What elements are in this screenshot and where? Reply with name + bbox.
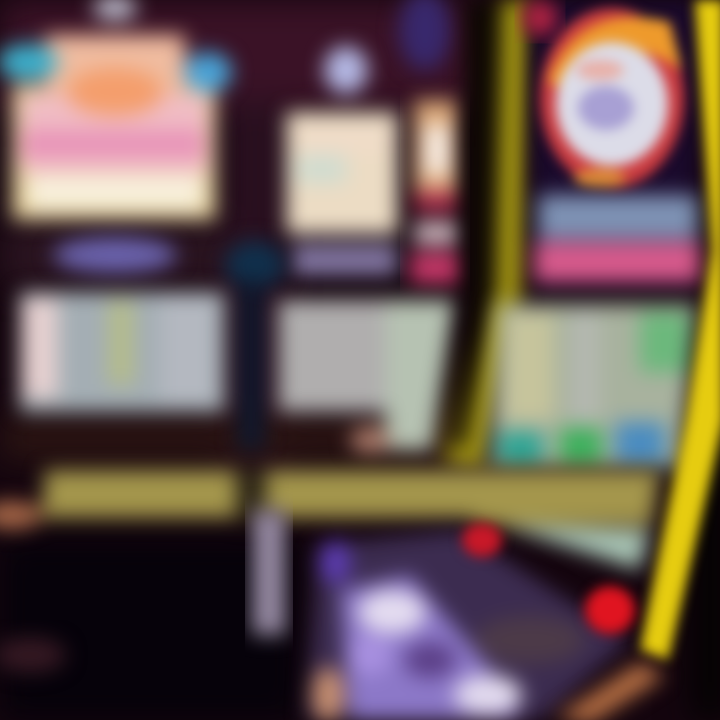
olive ledge bbox=[0, 468, 660, 570]
button deck bbox=[306, 530, 630, 720]
lower middle screen bbox=[278, 300, 455, 454]
narrow machine screen bbox=[410, 100, 460, 284]
bonus wheel bbox=[540, 8, 684, 188]
yellow pillar bbox=[444, 0, 530, 470]
white column bbox=[252, 510, 286, 635]
left top machine screen bbox=[0, 0, 232, 220]
blue-purple top accents bbox=[53, 0, 451, 450]
yellow cabinet edge bbox=[640, 0, 720, 660]
orange lower edge bbox=[0, 637, 665, 720]
red buttons bbox=[462, 523, 635, 634]
right machine upper panel bbox=[532, 0, 700, 290]
top red accent bbox=[522, 0, 558, 36]
lower right screen bbox=[490, 304, 696, 468]
lower left screen bbox=[20, 292, 225, 412]
middle top machine screen bbox=[286, 46, 398, 275]
